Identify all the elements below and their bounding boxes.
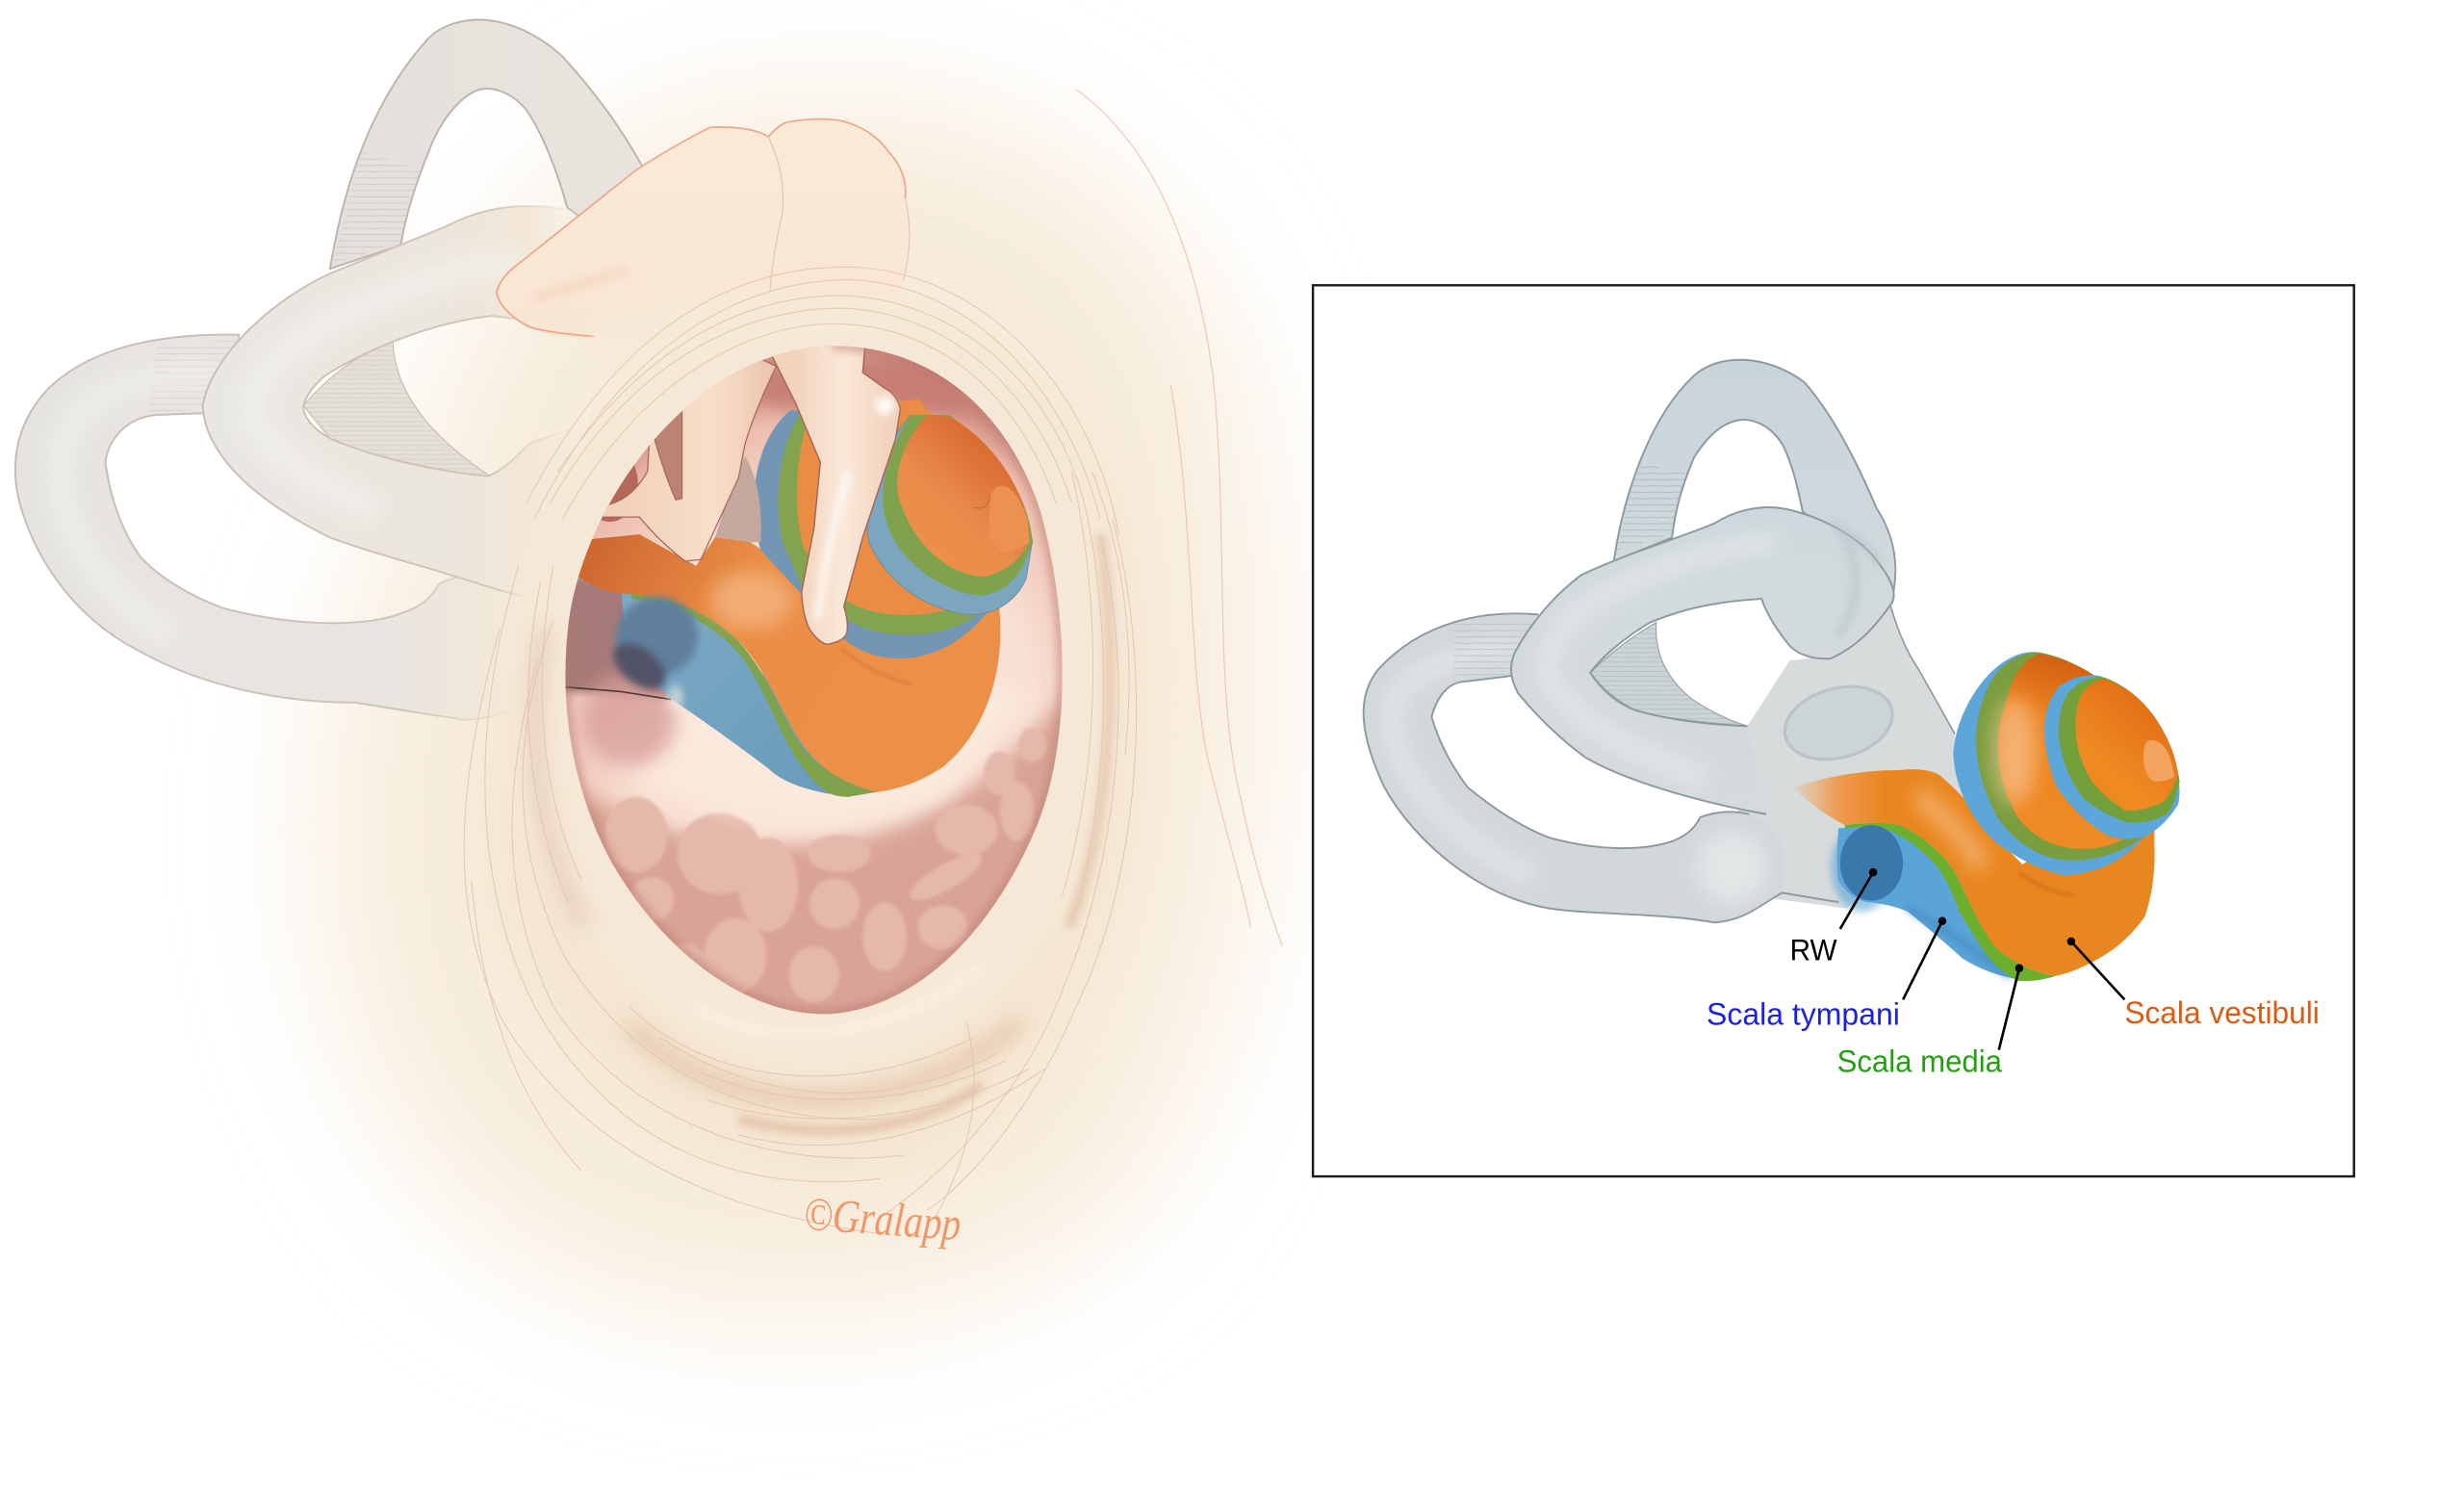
surgical opening bbox=[565, 346, 1063, 1015]
basal turn blue scala left bbox=[621, 593, 832, 793]
outer fine line right bbox=[1076, 90, 1282, 946]
stapes process bone bbox=[768, 338, 901, 644]
bony strut behind incus bbox=[715, 455, 761, 542]
middle cochlear turn left bbox=[756, 399, 987, 658]
cavity base bbox=[566, 346, 1063, 1015]
inset lateral canal bbox=[1364, 613, 1838, 922]
basal turn orange scala left bbox=[558, 534, 1000, 792]
dark strip beside incus bbox=[648, 377, 691, 506]
superior semicircular canal bbox=[330, 19, 648, 269]
cream background glow bbox=[321, 101, 1268, 1317]
lateral semicircular canal bbox=[15, 335, 542, 720]
inset basal green scala bbox=[1845, 823, 2056, 981]
round window bbox=[605, 597, 698, 710]
inset superior canal bbox=[1614, 360, 1895, 606]
inset horizontal canal bbox=[1511, 507, 1894, 814]
signature: ©Gralapp bbox=[803, 1187, 962, 1250]
air cells band bbox=[585, 697, 1062, 1015]
inset basal orange scala bbox=[1793, 769, 2155, 976]
horizontal semicircular canal bbox=[203, 206, 629, 613]
inset vestibule body bbox=[1736, 606, 1964, 909]
label: Scala vestibuli: Scala vestibuli bbox=[2124, 994, 2320, 1030]
label: Scala tympani bbox=[1707, 916, 1946, 1032]
rim of mastoid cavity bbox=[506, 283, 1120, 1130]
apical cochlear turn left bbox=[867, 415, 1033, 614]
inset web bbox=[1590, 623, 1748, 726]
incus short bone top bbox=[497, 119, 910, 340]
label: Scala tympani: Scala tympani bbox=[1707, 995, 1900, 1031]
round window RW inset bbox=[1840, 825, 1903, 901]
fine tissue lines around cavity bbox=[464, 267, 1137, 1234]
panel: surgical view illustration bbox=[15, 19, 1282, 1317]
top and left dark rose shading bbox=[558, 353, 1021, 767]
hollow behind incus bbox=[581, 447, 638, 522]
label: Scala media bbox=[1837, 964, 2023, 1078]
bony web behind horizontal canal bbox=[303, 338, 490, 477]
basal turn green scala left bbox=[631, 594, 885, 797]
inset middle turn bbox=[1953, 652, 2143, 875]
incus long process bbox=[581, 348, 777, 561]
label: Scala vestibuli bbox=[2067, 938, 2320, 1030]
label: RW: RW bbox=[1790, 934, 1837, 967]
label: RW bbox=[1790, 868, 1877, 967]
panel: inset diagram bbox=[1313, 285, 2354, 1176]
inner vignette of cavity bbox=[565, 346, 1063, 1014]
inset frame bbox=[1313, 285, 2354, 1176]
inset basal blue scala bbox=[1831, 824, 2027, 979]
label: Scala media: Scala media bbox=[1837, 1043, 2003, 1078]
soft rim over bone base bbox=[589, 291, 1021, 408]
inset apical turn bbox=[2044, 675, 2179, 838]
